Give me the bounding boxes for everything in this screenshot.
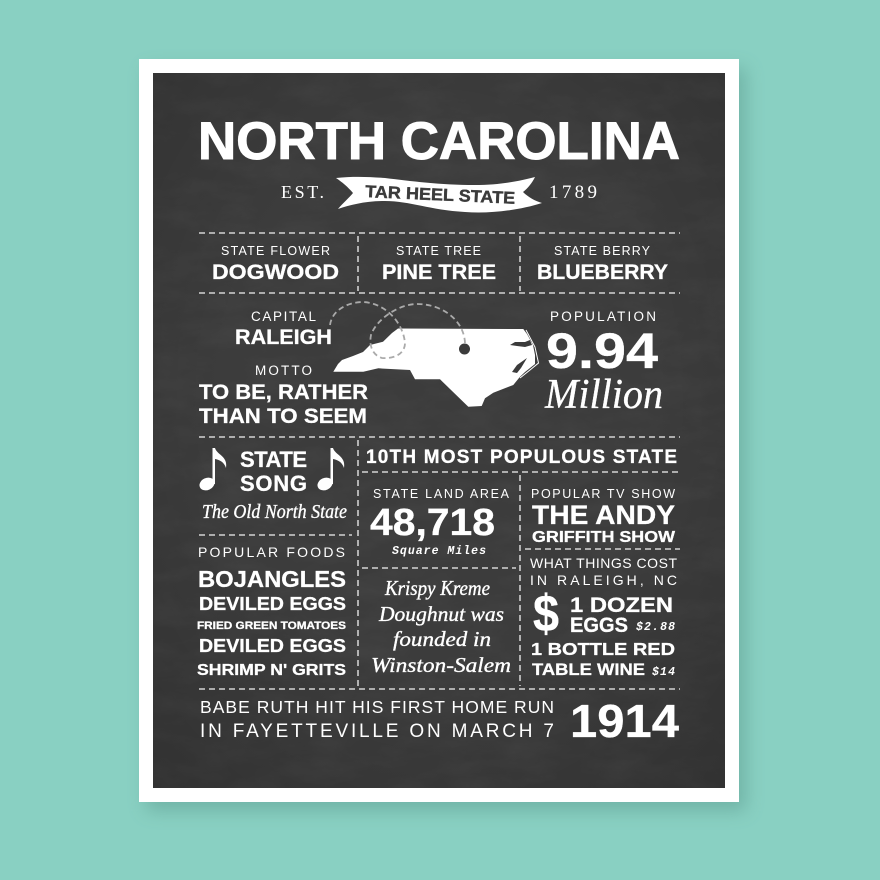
popular foods: BOJANGLES [198,566,346,592]
section dividers [199,233,680,689]
state song: SONG [240,471,307,496]
babe ruth fact: IN FAYETTEVILLE ON MARCH 7 [200,721,554,742]
motto: TO BE, RATHER [199,381,368,404]
state song: The Old North State [202,501,347,523]
motto: THAN TO SEEM [199,405,367,428]
population [544,309,663,418]
popular foods: SHRIMP N' GRITS [197,662,346,679]
land area: Square Miles [392,545,486,558]
capital: RALEIGH [235,326,332,349]
cost of living: 1 DOZEN [570,594,673,617]
state flower [212,244,339,284]
popular foods [197,544,346,679]
state flower: DOGWOOD [212,261,339,284]
state berry [537,244,668,284]
outer banks [520,330,538,378]
right music note [315,448,344,493]
cost of living: $14 [652,666,675,679]
population: POPULATION [550,309,656,324]
state song: STATE [240,447,307,472]
banner text: TAR HEEL STATE [365,182,516,208]
state berry: BLUEBERRY [537,261,668,284]
motto: MOTTO [255,363,312,378]
established year and banner [281,177,597,213]
year: 1789 [549,182,597,203]
land area [370,487,510,558]
state berry: STATE BERRY [554,244,651,258]
left music note [197,448,226,493]
population: 9.94 [546,323,658,379]
icon: dollar sign: $ [533,585,559,643]
state tree: PINE TREE [382,261,496,284]
capital: CAPITAL [251,309,316,324]
cost of living: WHAT THINGS COST [530,555,677,571]
cost of living: TABLE WINE [532,660,645,679]
doughnut fact: Winston-Salem [371,653,511,677]
motto [199,363,368,428]
state tree [382,244,496,284]
established year and banner: EST. [281,182,324,202]
popular foods: DEVILED EGGS [199,594,346,614]
popular tv show: THE ANDY [532,500,675,530]
cost of living: $2.88 [636,621,675,634]
state flower: STATE FLOWER [221,244,330,258]
popular tv show: POPULAR TV SHOW [531,487,675,501]
popular foods: FRIED GREEN TOMATOES [197,620,346,632]
popular foods: POPULAR FOODS [198,544,345,560]
population: Million [544,372,663,418]
poster frame [139,59,739,802]
babe ruth fact: BABE RUTH HIT HIS FIRST HOME RUN [200,697,554,717]
sound [510,340,532,347]
land area: 48,718 [370,502,495,544]
popular tv show: GRIFFITH SHOW [532,529,675,546]
babe ruth fact: 1914 [570,695,679,747]
cost of living [530,555,677,679]
chalkboard panel [153,73,725,788]
cost of living: IN RALEIGH, NC [530,572,677,588]
map of North Carolina [330,302,538,407]
dashed route [330,302,465,358]
land area: STATE LAND AREA [373,487,510,501]
doughnut fact: Doughnut was [378,602,504,626]
state symbols row [212,244,668,284]
cost of living: 1 BOTTLE RED [531,639,675,659]
doughnut fact: founded in [393,627,491,651]
state song [197,447,347,523]
capital [235,309,332,349]
cost of living: EGGS [570,614,628,637]
capital marker [459,344,470,354]
doughnut fact: Krispy Kreme [384,576,490,600]
lower sound [512,358,527,373]
doughnut fact [371,576,511,677]
babe ruth fact [200,695,679,747]
population rank: 10TH MOST POPULOUS STATE [366,447,677,468]
state tree: STATE TREE [396,244,481,258]
title: NORTH CAROLINA [198,112,680,171]
popular foods: DEVILED EGGS [199,636,346,656]
banner ribbon [336,177,542,213]
popular tv show [531,487,675,546]
